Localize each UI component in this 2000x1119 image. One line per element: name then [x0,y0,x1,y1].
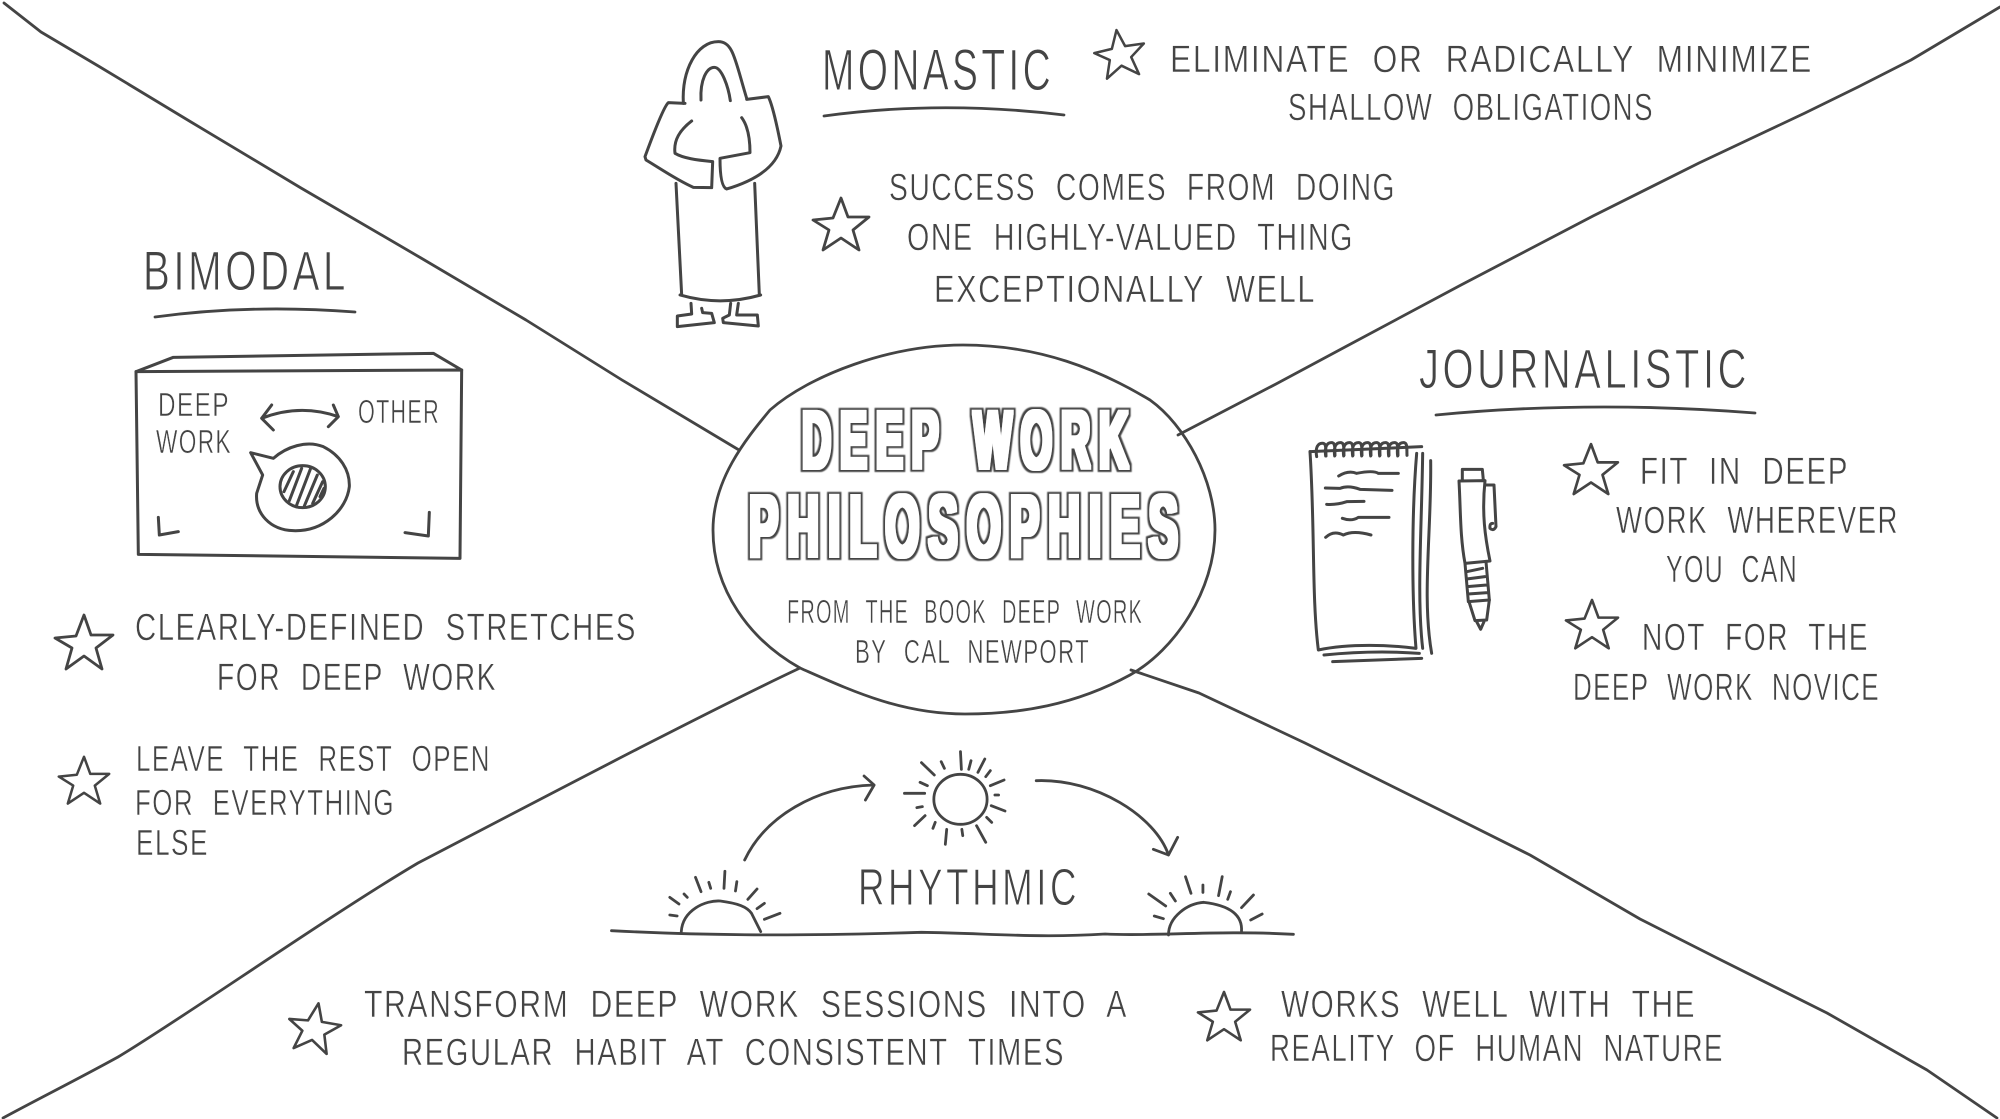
text: success line 3: EXCEPTIONALLY WELL [934,269,1316,311]
panel: journalistic [1310,337,1899,709]
text: fit line 2: WORK WHEREVER [1616,500,1899,542]
text: human nature line 2: REALITY OF HUMAN NATURE [1270,1028,1724,1070]
icon: star [1566,600,1618,648]
text: obligations line: SHALLOW OBLIGATIONS [1288,87,1654,129]
label: other: OTHER [358,393,440,430]
text: stretches line 1: CLEARLY-DEFINED STRETCHES [135,607,637,649]
label: deep: DEEP [158,386,230,423]
icon: sun cycle [611,752,1293,936]
text: transform line 2: REGULAR HABIT AT CONSISTENT TIMES [402,1032,1065,1074]
panel: bimodal [55,239,637,863]
central ellipse: title [713,345,1215,714]
text: rest line 3: ELSE [136,822,209,863]
text: rest line 1: LEAVE THE REST OPEN [136,738,491,779]
icon: star [55,615,113,669]
text: novice line 1: NOT FOR THE [1642,617,1869,659]
text: stretches line 2: FOR DEEP WORK [217,657,497,699]
icon: monk [645,42,781,327]
title line 2: PHILOSOPHIES [749,478,1187,575]
icon: star [813,198,869,250]
icon: star [1092,27,1148,80]
subtitle line 2: BY CAL NEWPORT [855,633,1090,670]
text: rest line 2: FOR EVERYTHING [135,782,395,823]
text: success line 1: SUCCESS COMES FROM DOING [889,167,1396,209]
icon: star [1198,992,1250,1040]
text: human nature line 1: WORKS WELL WITH THE [1281,984,1696,1026]
text: fit line 1: FIT IN DEEP [1640,451,1849,493]
text: eliminate line: ELIMINATE OR RADICALLY MINIMIZE [1170,39,1813,81]
panel: monastic [645,27,1813,327]
icon: notebook [1310,443,1432,662]
icon: star [1564,444,1618,494]
heading: monastic: MONASTIC [822,38,1054,103]
subtitle line 1: FROM THE BOOK DEEP WORK [787,593,1143,630]
heading: bimodal: BIMODAL [143,239,349,302]
label: work: WORK [156,423,232,460]
heading underline [1436,407,1755,415]
icon: star [284,999,344,1056]
heading underline [824,108,1064,116]
text: transform line 1: TRANSFORM DEEP WORK SESSIONS INTO A [364,984,1128,1026]
heading: rhythmic: RHYTHMIC [858,859,1080,917]
icon: calendar box [136,353,462,558]
icon: star [59,757,109,804]
panel: rhythmic [284,752,1724,1074]
icon: pen [1459,469,1496,629]
text: success line 2: ONE HIGHLY-VALUED THING [907,217,1354,259]
heading underline [155,309,355,317]
heading: journalistic: JOURNALISTIC [1419,337,1750,400]
central ellipse: title: DEEP WORK [802,395,1137,486]
text: fit line 3: YOU CAN [1666,549,1798,591]
